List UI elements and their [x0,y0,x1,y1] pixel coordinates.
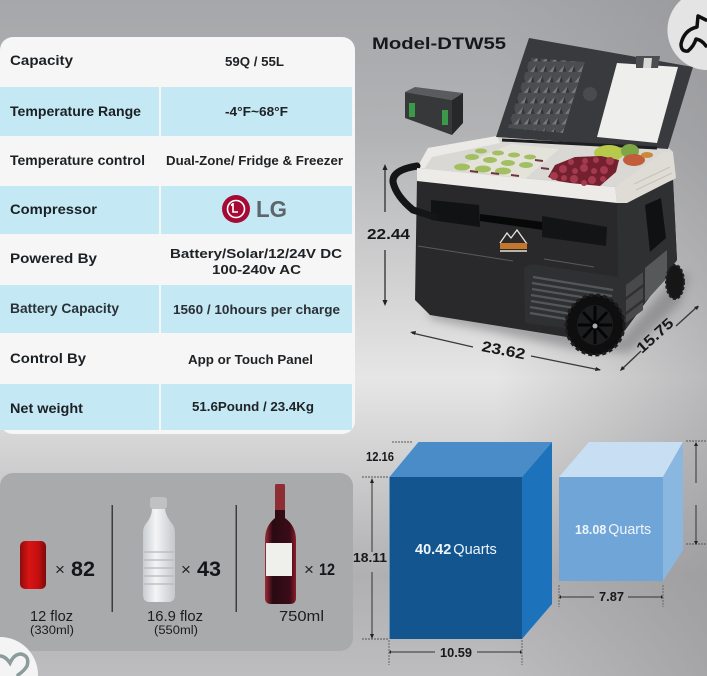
item: wine bottle: 750ml [279,609,324,625]
item: wine bottle: × [304,560,314,579]
tray front and right wall [417,152,676,203]
item: wine bottle [265,484,335,625]
dimension: 10.59 [389,640,522,665]
row: powered by: Powered By [10,251,98,266]
row: powered by: Battery/Solar/12/24V DC [170,246,343,261]
row: battery capacity: 1560 / 10hours per charge [173,302,340,317]
rear wheel [666,265,684,299]
illustration: portable fridge [393,38,693,355]
dimension: 7.87 [559,585,663,607]
row: powered by [10,246,343,277]
row: temperature range [10,104,288,119]
row: capacity: Capacity [10,53,74,68]
row: temperature control [10,153,343,168]
dimension: 12.16 [366,442,413,464]
icon: LG logo: LG [256,196,287,222]
item: soda can [20,541,95,637]
row: net weight: Net weight [10,401,84,416]
row: net weight: 51.6Pound / 23.4Kg [192,399,314,414]
row: temperature control: Temperature control [10,153,145,168]
dimension: 10.59: 10.59 [440,645,472,660]
dimension: width 23.62: 23.62 [480,338,527,363]
item: water bottle: × [181,560,191,579]
row: battery capacity [10,301,340,317]
food: fruit and grapes [548,144,653,186]
tray back [417,136,673,187]
panel: drink capacity [0,473,353,651]
ground shadow [430,273,690,353]
dimension: height 22.44: 22.44 [367,227,410,243]
row: control by: App or Touch Panel [188,352,313,367]
panel: specification table [0,37,355,434]
item: soda can: × [55,560,65,579]
icon: share button overlay [667,0,707,70]
row: control by [10,351,313,367]
item: water bottle [143,497,221,637]
icon: LG logo [222,195,287,223]
row: capacity [10,53,284,69]
item: wine bottle: 12 [319,560,335,579]
dimension: depth 15.75 [620,306,699,371]
heading: model name: Model-DTW55 [372,34,506,53]
row: temperature control: Dual-Zone/ Fridge & Freezer [166,153,343,168]
latches [431,198,666,252]
front wheel [566,295,624,355]
chart: freezer compartment cube: 18.08Quarts [575,522,651,538]
dimension: 12.16: 12.16 [366,450,394,464]
row: powered by: 100-240v AC [212,262,302,277]
chart: freezer compartment cube [559,442,683,581]
dimension: height 22.44 [367,164,410,306]
logo on body [500,230,527,252]
row: compressor: Compressor [10,202,98,217]
row: capacity: 59Q / 55L [225,54,284,69]
carry handle [393,166,435,217]
row: control by: Control By [10,351,87,366]
dimension: width 23.62 [410,331,601,371]
fridge body [415,178,677,337]
item: soda can: (330ml) [30,625,74,637]
icon: favourite button overlay [0,637,38,676]
item: water bottle: (550ml) [154,625,198,637]
row: compressor [10,195,287,223]
fridge lid [496,38,693,149]
chart: fridge compartment cube: 40.42Quarts [415,542,497,558]
item: water bottle: 16.9 floz [147,609,203,625]
dimension: 18.11 [353,477,388,639]
row: temperature range: -4°F~68°F [225,104,288,119]
item: water bottle: 43 [197,558,221,581]
chart: fridge compartment cube [389,442,552,639]
dimension: 7.87: 7.87 [599,589,624,604]
icon: removable battery [405,87,463,135]
dimension: depth 15.75: 15.75 [633,315,677,357]
dimension: freezer height [686,441,707,545]
item: soda can: 82 [71,558,95,581]
row: temperature range: Temperature Range [10,104,141,119]
row: net weight [10,399,314,416]
item: soda can: 12 floz [30,609,73,625]
row: battery capacity: Battery Capacity [10,301,119,316]
dimension: 18.11: 18.11 [353,550,387,565]
food: drink packs [454,144,559,179]
